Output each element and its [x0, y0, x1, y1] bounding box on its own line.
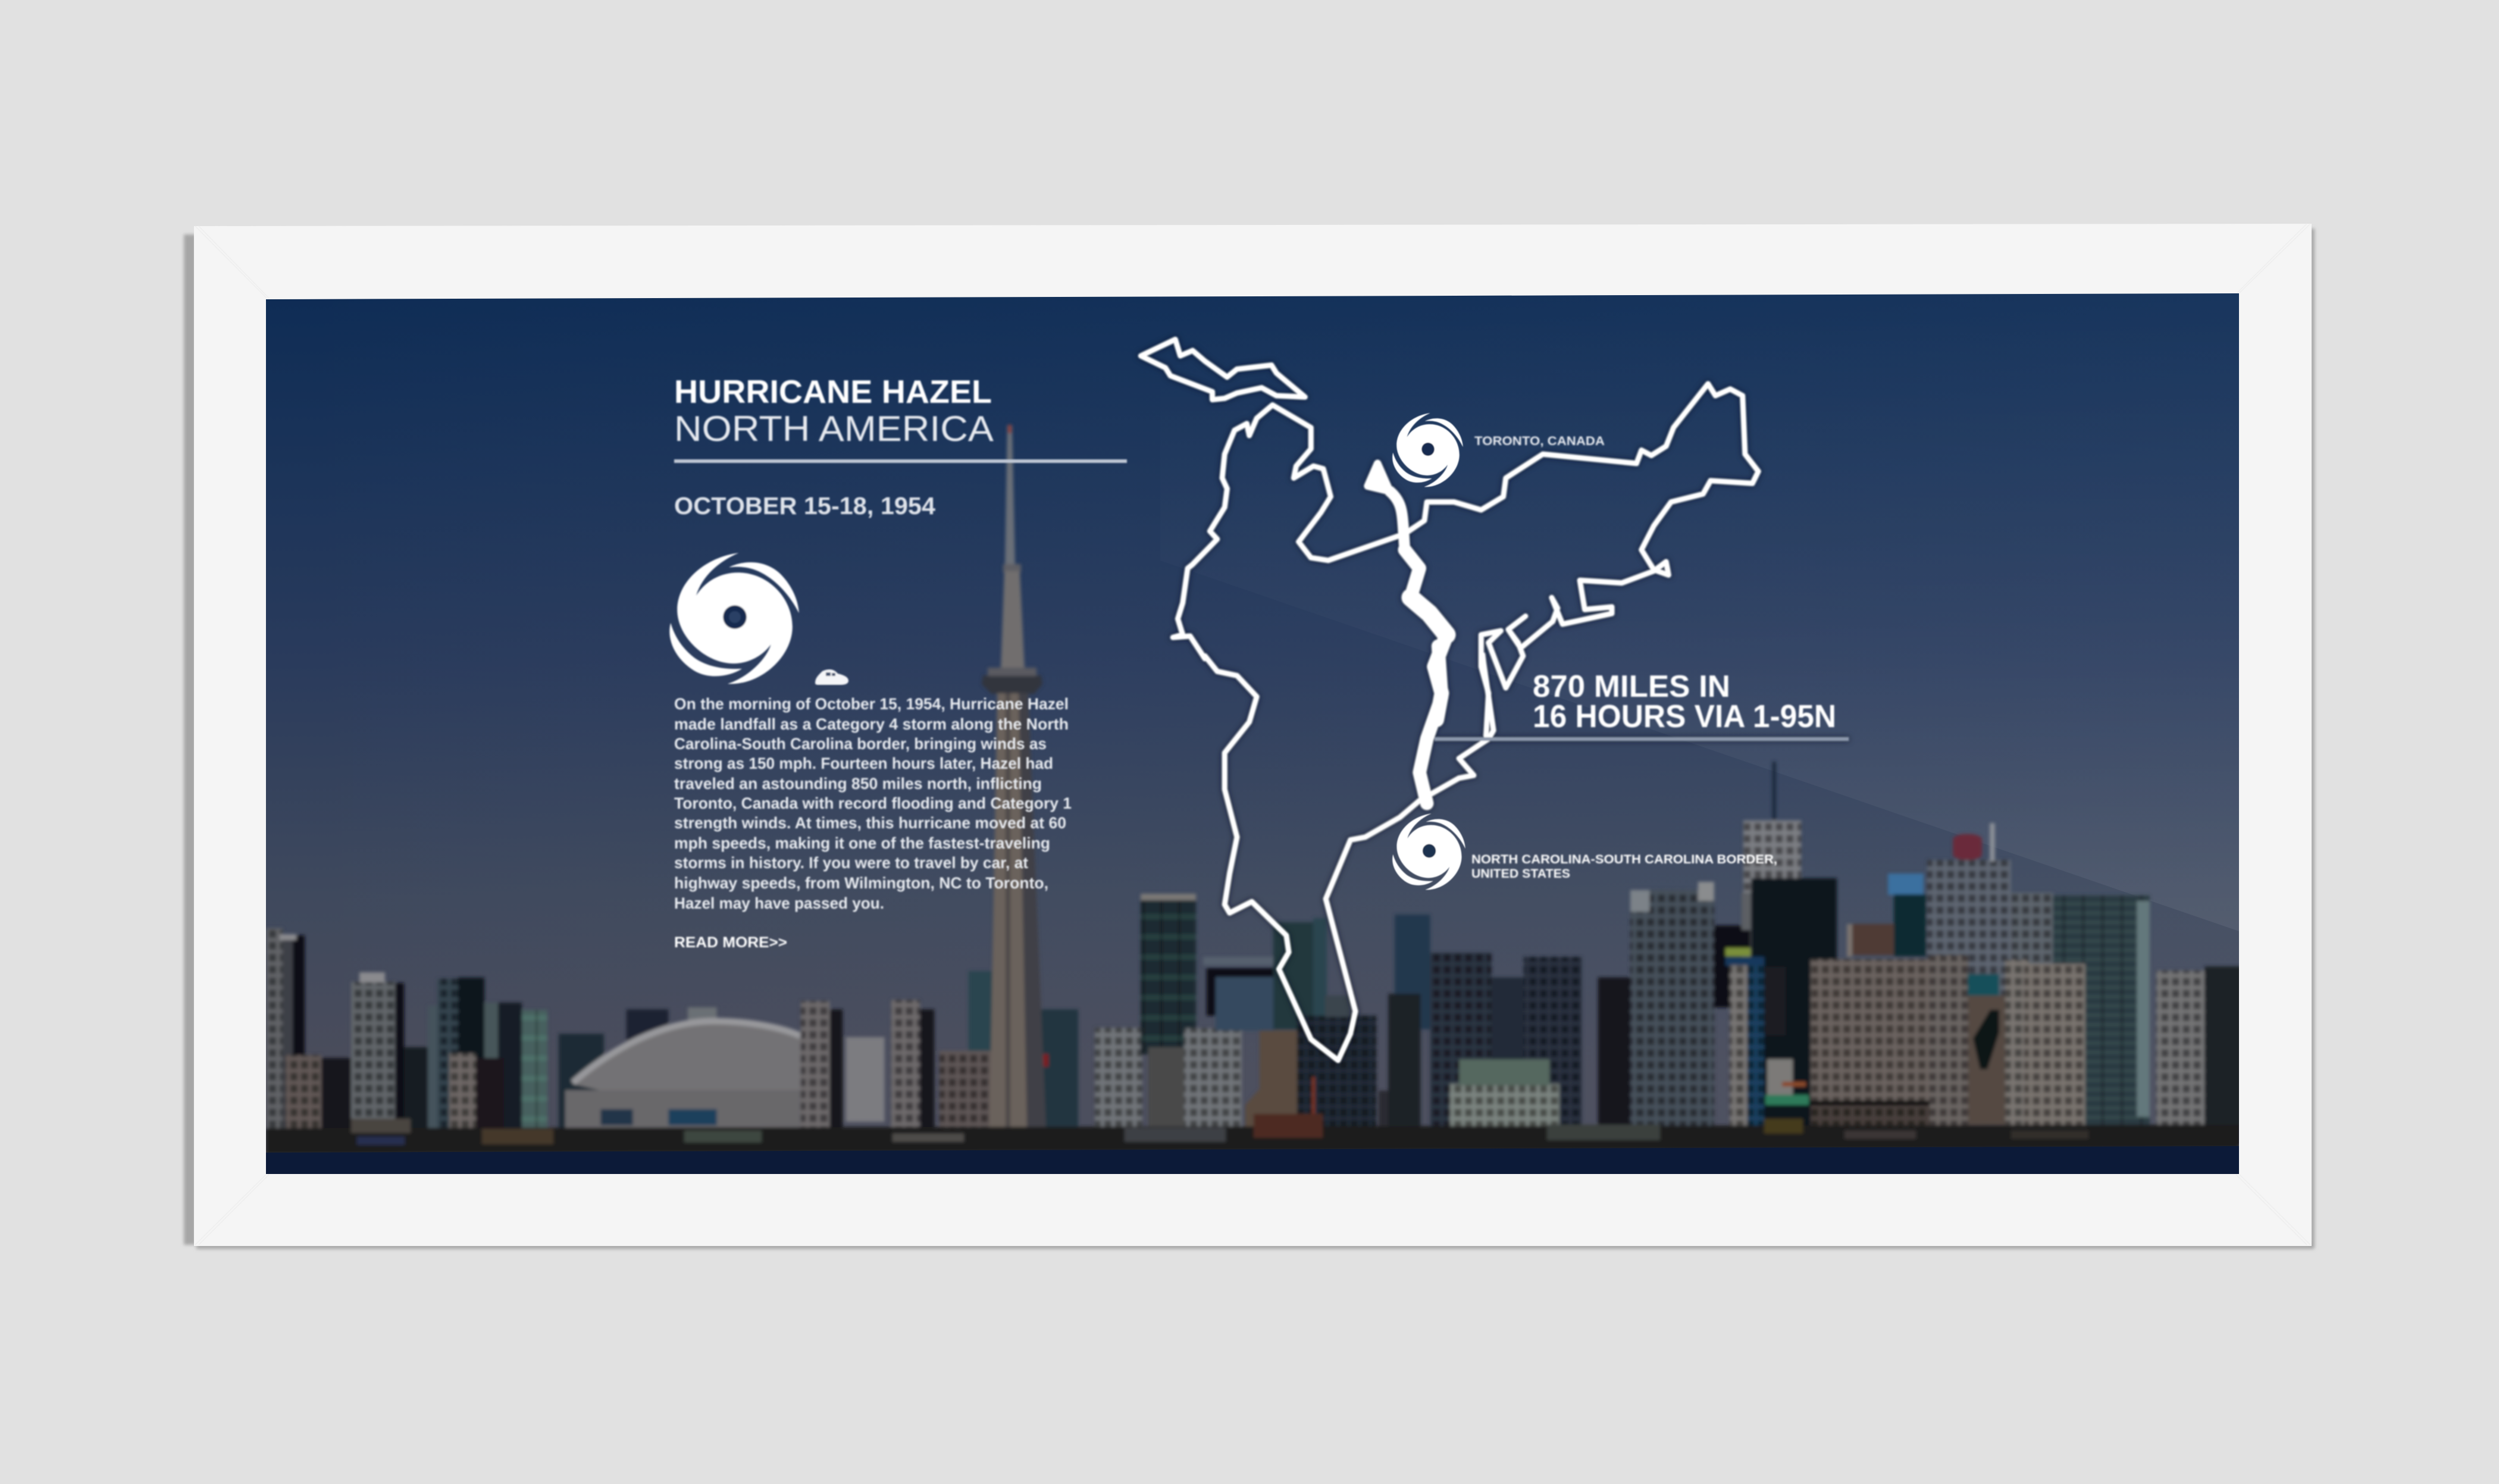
heading: Hurricane Hazel: HURRICANE HAZEL: [674, 373, 992, 410]
label: Carolina landfall location: UNITED STATES: [1471, 867, 1570, 881]
map: eastern North America outline: [1141, 339, 1849, 1060]
icon: small car: [815, 669, 848, 685]
callout: route distance: 870 MILES IN: [1533, 669, 1730, 704]
lake water: [266, 1146, 2239, 1176]
skyline: far left towers: [266, 425, 2243, 1154]
icon: large hurricane symbol: [669, 553, 799, 684]
text block: storm narrative: On the morning of October 15, 1954, Hurricane Hazel: [674, 695, 1069, 713]
text block: storm narrative: traveled an astounding 850 miles north, inflicting: [674, 775, 1042, 793]
text block: storm narrative: [674, 695, 1072, 912]
skyline: right towers: [1726, 874, 1926, 1134]
text block: storm narrative: Carolina-South Carolina border, bringing winds as: [674, 735, 1047, 753]
sky background: [266, 292, 2239, 1154]
subheading: North America: NORTH AMERICA: [674, 409, 994, 449]
icon: hurricane at Toronto: [1392, 413, 1463, 487]
outline: northern half: [1173, 384, 1758, 735]
text block: storm narrative: storms in history. If you were to travel by car, at: [674, 854, 1028, 872]
text block: title: [674, 373, 1127, 519]
picture frame shadow: [184, 228, 2315, 1249]
callout: route distance: 16 HOURS VIA 1-95N: [1533, 699, 1836, 734]
text block: storm narrative: Toronto, Canada with record flooding and Category 1: [674, 794, 1072, 812]
text block: storm narrative: Hazel may have passed you.: [674, 894, 884, 912]
text block: storm narrative: highway speeds, from Wilmington, NC to Toronto,: [674, 874, 1048, 892]
link: read more: READ MORE>>: [674, 934, 787, 951]
upper peninsula of Michigan: [1141, 339, 1305, 400]
skyline: dome and mid-left towers: [559, 971, 1078, 1147]
translucent diagonal light panel: [1789, 776, 2239, 931]
waterfront base: [266, 1114, 2239, 1154]
text block: storm narrative: made landfall as a Category 4 storm along the North: [674, 715, 1069, 733]
leader line under route callout: [1435, 737, 1849, 741]
outline: southern half: [1205, 655, 1493, 1060]
date: OCTOBER 15-18, 1954: [674, 492, 935, 519]
panel: Toronto skyline scene: [266, 292, 2243, 1176]
text block: storm narrative: strong as 150 mph. Fourteen hours later, Hazel had: [674, 754, 1053, 772]
title rule: [674, 459, 1127, 463]
storm track, Toronto to the Carolinas: [1368, 464, 1446, 803]
callout: route distance: [1533, 669, 1836, 734]
label: Carolina landfall location: [1471, 853, 1777, 881]
text block: storm narrative: strength winds. At times, this hurricane moved at 60: [674, 814, 1066, 832]
icon: hurricane at Carolina border: [1392, 813, 1465, 890]
label: Carolina landfall location: NORTH CAROLINA-SOUTH CAROLINA BORDER,: [1471, 853, 1777, 866]
label: Toronto, Canada: TORONTO, CANADA: [1474, 434, 1605, 448]
CN Tower: [982, 425, 1046, 1131]
picture frame: [194, 224, 2312, 1246]
text block: storm narrative: mph speeds, making it one of the fastest-traveling: [674, 834, 1050, 852]
skyline: centre towers and bridge: [1094, 892, 1390, 1129]
skyline: centre-right towers: [1388, 762, 1801, 1145]
